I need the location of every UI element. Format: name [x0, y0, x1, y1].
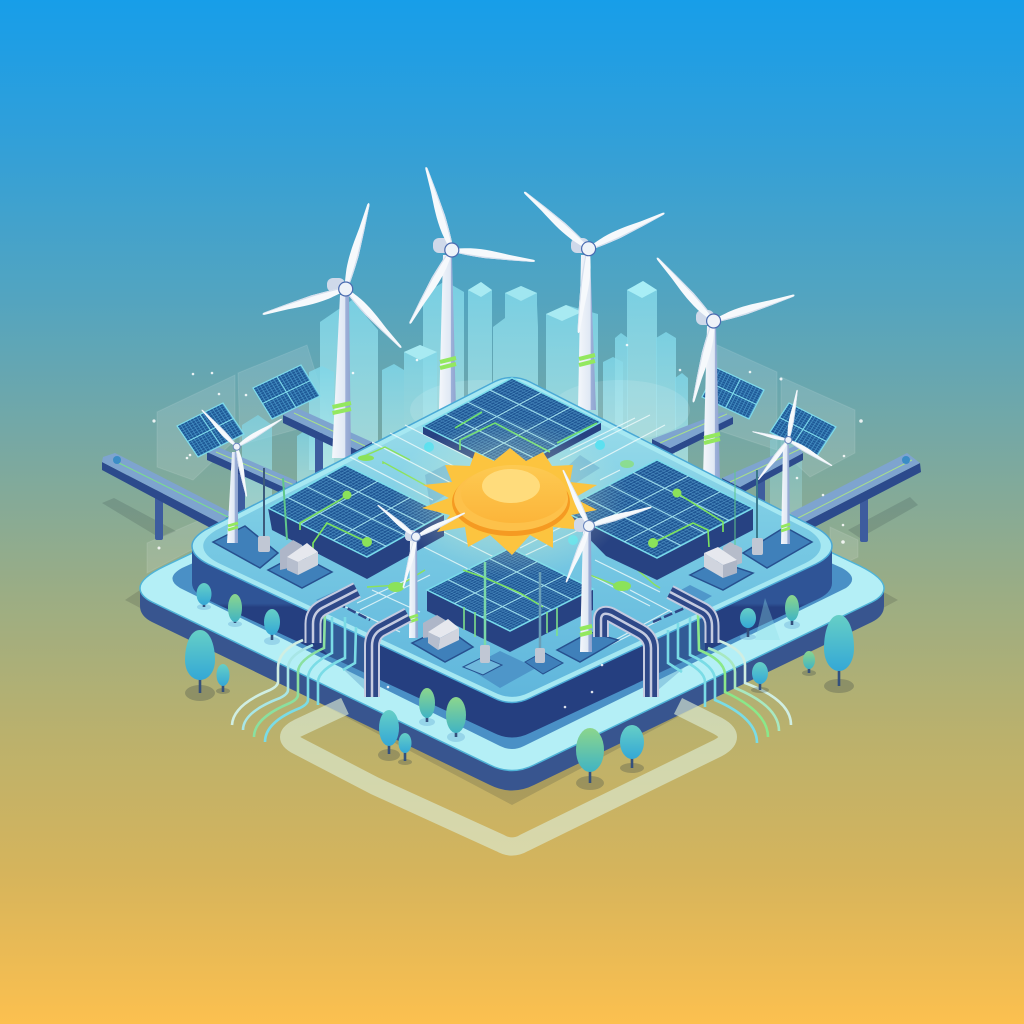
blue floor patches [316, 585, 712, 688]
turbine 3 [521, 189, 666, 410]
solar panel S1 [177, 403, 244, 457]
sun inner ring [454, 467, 568, 531]
pad: right building [690, 561, 753, 590]
ground shadow under the base [125, 590, 898, 805]
panel wiring nodes [648, 488, 682, 548]
conduit: front right C [670, 592, 712, 643]
background city skyline [242, 281, 802, 520]
sun glow [392, 418, 628, 578]
tree shadows [185, 670, 854, 790]
conduit: front left B [372, 615, 408, 697]
solar panel S2 [253, 365, 320, 419]
panel wiring [455, 412, 597, 452]
middle left bridge [207, 447, 297, 497]
vertical green risers [464, 607, 557, 637]
cable bundles dropping off the platform [232, 610, 791, 743]
solar array: left [268, 465, 444, 579]
left cables [232, 610, 356, 742]
turbine 8 [560, 469, 653, 652]
pad: bottom building [412, 627, 473, 662]
panel surface [427, 548, 593, 631]
base top surface [140, 406, 884, 770]
turbine 1 [261, 202, 405, 458]
green crowns [228, 594, 815, 772]
bridge legs [155, 433, 868, 542]
panel surface [561, 460, 753, 558]
strip tree shadows [197, 604, 800, 742]
solar array: top [423, 378, 601, 478]
solar array: right [561, 460, 753, 580]
turbine 7 [376, 503, 466, 638]
front wind turbines [199, 389, 834, 652]
building: right [704, 542, 742, 578]
sun orange rim [452, 468, 570, 536]
conduit: front right D [601, 614, 651, 697]
upper platform [192, 378, 832, 738]
cable loop on the ground [289, 706, 728, 846]
lit wall between right conduits [658, 610, 705, 690]
turbine 6 [752, 389, 834, 544]
upper left bridge [283, 408, 372, 458]
ground shadows of the bridges [102, 497, 918, 538]
building: left [280, 540, 318, 575]
sun dome [461, 465, 567, 523]
panel base [427, 589, 593, 652]
right cables [668, 613, 791, 743]
panel wiring [300, 495, 367, 556]
soft shadows beside the sun [425, 455, 600, 505]
pad: centre-right equipment [525, 652, 563, 674]
equipment pads and substations [213, 468, 812, 675]
pad: left building [268, 554, 332, 588]
equipment masts [264, 468, 757, 650]
turbine 2 [406, 166, 536, 410]
trees [185, 583, 854, 790]
sun [392, 418, 628, 578]
panel surface [423, 378, 601, 470]
platform top surface [203, 383, 821, 697]
panel surface [268, 465, 444, 557]
green circuit traces on the surface [360, 447, 660, 590]
middle right bridge [722, 445, 803, 494]
translucent hologram cone [755, 598, 780, 640]
panel base [561, 508, 753, 580]
tilted solar panels on bridges [177, 365, 836, 457]
conduit pipes over the platform edge [313, 590, 712, 697]
lower base platform [140, 406, 884, 790]
solar array: bottom [427, 548, 593, 652]
lit wall between left conduits [323, 610, 365, 690]
platform rim [192, 378, 832, 702]
upper right bridge [652, 412, 733, 455]
panel base [423, 422, 601, 478]
circuit traces on the surface [337, 415, 672, 650]
elevated pipeline bridges [102, 408, 921, 542]
sun highlight [482, 469, 540, 503]
dark connector dashes [337, 603, 687, 622]
recessed blue strip around the platform [172, 420, 852, 749]
panel wiring nodes [342, 490, 372, 547]
mast bases [258, 536, 763, 663]
back wind turbines [261, 166, 796, 478]
sparkles [152, 344, 863, 708]
panel wiring [463, 570, 543, 607]
base side wall [140, 586, 884, 790]
solar panel S3 [702, 368, 764, 419]
conduit: front left A [313, 590, 357, 643]
pad: right turbine [743, 527, 812, 568]
turbine 4 [653, 255, 796, 478]
turbine 5 [199, 408, 283, 543]
sun rays [422, 448, 597, 555]
far left bridge [102, 453, 232, 533]
pad: centre-right turbine [557, 632, 618, 662]
far right bridge [790, 453, 921, 533]
platform side wall [192, 546, 832, 738]
tree trunks [200, 600, 839, 783]
pad: left turbine [213, 526, 278, 568]
solar panel S4 [770, 403, 836, 456]
building: bottom [423, 615, 459, 650]
blue crowns [185, 583, 854, 759]
cyan sensor nodes [424, 440, 652, 545]
panel wiring [653, 493, 723, 547]
panel base [268, 508, 444, 579]
green circuit nodes [358, 455, 634, 592]
pad: bottom equipment [463, 657, 502, 675]
translucent glass panels behind the platform [147, 345, 858, 573]
